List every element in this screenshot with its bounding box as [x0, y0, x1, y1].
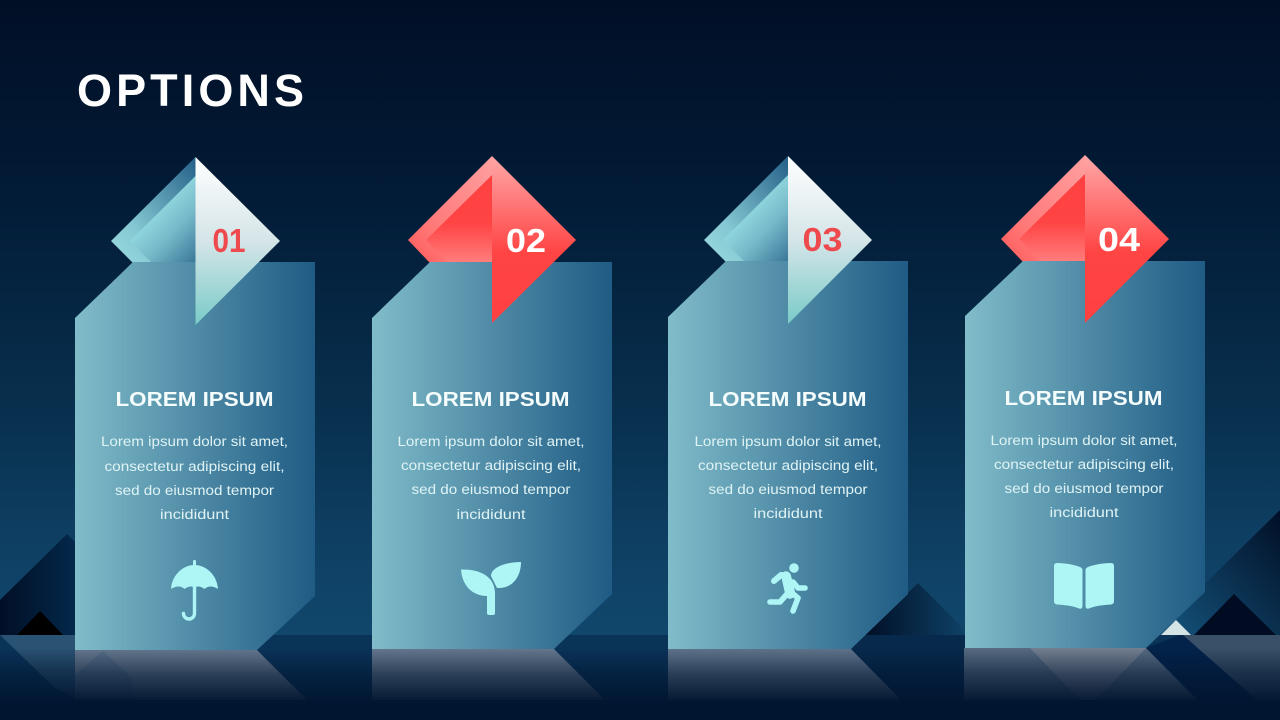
icon: umbrella	[171, 560, 218, 619]
body text: option 02: consectetur adipiscing elit,	[401, 458, 581, 473]
number 03: 03	[802, 221, 842, 258]
icon: runner	[770, 563, 805, 611]
body text: option 04: Lorem ipsum dolor sit amet,	[990, 433, 1178, 448]
card body: option 03	[668, 261, 908, 649]
card reflections	[75, 648, 1197, 700]
body text: option 01: incididunt	[160, 507, 229, 522]
body text: option 03	[694, 434, 882, 521]
body text: option 02: incididunt	[456, 507, 526, 522]
panel: option 01	[75, 157, 315, 650]
body text: option 04	[990, 433, 1178, 520]
body text: option 01: Lorem ipsum dolor sit amet,	[101, 434, 288, 449]
panel: option 02	[372, 156, 612, 649]
heading: option 01: LOREM IPSUM	[116, 388, 274, 411]
mountains behind the cards	[0, 510, 1280, 635]
body text: option 01: consectetur adipiscing elit,	[104, 459, 284, 474]
body text: option 02: sed do eiusmod tempor	[412, 482, 571, 497]
heading: option 04: LOREM IPSUM	[1004, 387, 1162, 410]
body text: option 03: incididunt	[754, 506, 823, 521]
body text: option 03: sed do eiusmod tempor	[708, 482, 868, 497]
card body: option 04	[965, 261, 1205, 648]
diamond front: option 01	[196, 157, 280, 325]
card body: option 02	[372, 262, 612, 649]
body text: option 01: sed do eiusmod tempor	[115, 483, 275, 498]
body text: option 04: consectetur adipiscing elit,	[994, 457, 1174, 472]
diamond front: option 03	[788, 156, 872, 324]
diamond front: option 02	[492, 156, 576, 323]
body text: option 02	[398, 434, 584, 522]
body text: option 03: consectetur adipiscing elit,	[698, 458, 878, 473]
panel: option 03	[668, 156, 908, 649]
diamond back: option 03	[704, 156, 788, 262]
diamond back: option 04	[1001, 155, 1085, 262]
body text: option 01	[101, 434, 288, 522]
card body: option 01	[75, 262, 315, 650]
title: OPTIONS	[77, 65, 304, 116]
number 04: 04	[1098, 221, 1141, 258]
body text: option 03: Lorem ipsum dolor sit amet,	[694, 434, 882, 449]
diamond front: option 04	[1085, 155, 1169, 323]
number 01: 01	[212, 222, 246, 259]
diamond back: option 02	[408, 156, 492, 263]
number 02: 02	[506, 222, 546, 259]
panel: option 04	[965, 155, 1205, 648]
ground with reflections	[0, 635, 1280, 720]
heading: option 02: LOREM IPSUM	[412, 388, 570, 411]
body text: option 04: incididunt	[1050, 505, 1119, 520]
heading: option 03: LOREM IPSUM	[708, 388, 866, 411]
icon: sprout	[461, 562, 521, 615]
diamond back: option 01	[111, 157, 196, 263]
body text: option 04: sed do eiusmod tempor	[1004, 481, 1164, 496]
reflection fade	[0, 635, 1280, 720]
body text: option 02: Lorem ipsum dolor sit amet,	[398, 434, 584, 449]
icon: open book	[1054, 563, 1114, 609]
